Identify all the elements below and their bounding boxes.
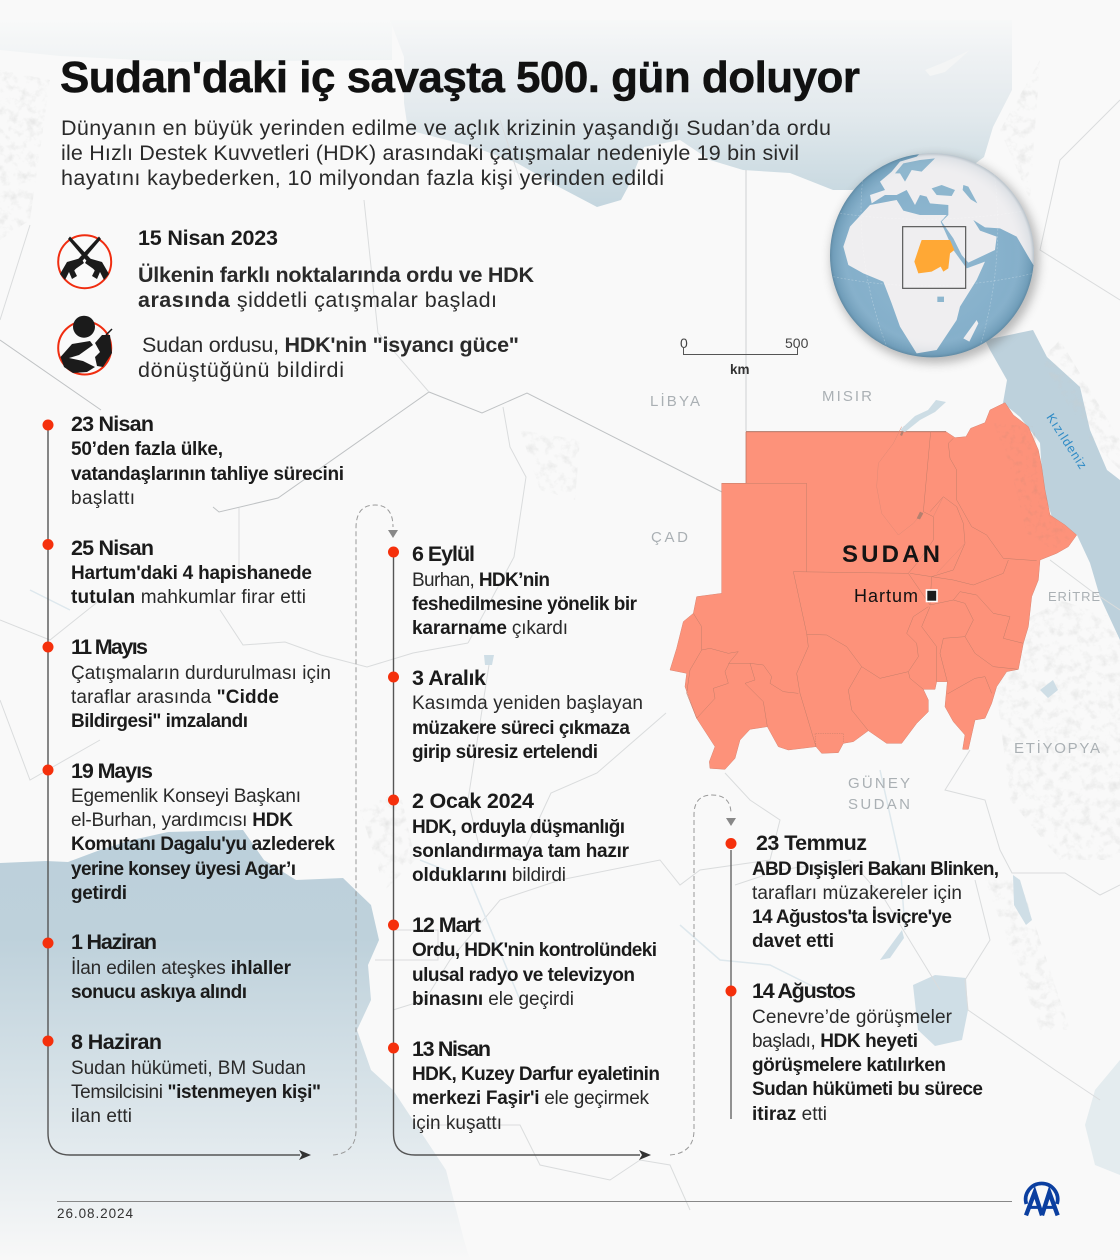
country labels: LİBYA: [650, 392, 700, 410]
entry: 23 Temmuz: davet etti: [752, 931, 834, 952]
entry: 6 Eylül: kararname çıkardı: [412, 618, 568, 639]
text: clashes started: arasında şiddetli çatışmalar başladı: [138, 288, 497, 312]
entry: 2 Ocak 2024: HDK, orduyla düşmanlığı: [412, 817, 625, 838]
entry: 11 Mayıs: [71, 635, 331, 732]
map: Sudan: [670, 403, 1077, 769]
entry: 1 Haziran: 1 Haziran: [71, 930, 157, 954]
entry: 19 Mayıs: yerine konsey üyesi Agar’ı: [71, 859, 296, 880]
timeline: first column: [42, 412, 398, 1160]
entry: 19 Mayıs: 19 Mayıs: [71, 759, 153, 783]
text: clashes started: [138, 262, 534, 312]
date: 26.08.2024: [57, 1206, 133, 1221]
entry: 13 Nisan: merkezi Faşir'i ele geçirmek: [412, 1088, 650, 1109]
entry: 14 Ağustos: itiraz etti: [752, 1104, 827, 1125]
icon: crossed rifles: [58, 235, 111, 288]
entry: 13 Nisan: HDK, Kuzey Darfur eyaletinin: [412, 1064, 660, 1085]
land: [843, 200, 985, 353]
entry: 13 Nisan: [412, 1037, 660, 1134]
scale bar: 500: [785, 335, 809, 351]
entry: 8 Haziran: Temsilcisini "istenmeyen kişi": [71, 1082, 321, 1103]
text: army statement: [138, 333, 519, 382]
entry: 14 Ağustos: görüşmelere katılırken: [752, 1055, 946, 1076]
entry: 13 Nisan: 13 Nisan: [412, 1037, 491, 1061]
entry: 3 Aralık: [412, 666, 643, 763]
entry: 12 Mart: binasını ele geçirdi: [412, 989, 574, 1010]
entry: 6 Eylül: [412, 542, 638, 639]
timeline: second column: [388, 542, 736, 1160]
Indian Ocean corner: [1085, 1060, 1120, 1175]
entry: 8 Haziran: ilan etti: [71, 1106, 132, 1127]
timeline: third column: [726, 831, 999, 1125]
country labels: ERİTRE: [1048, 589, 1100, 604]
entry: 1 Haziran: İlan edilen ateşkes ihlaller: [71, 958, 292, 979]
label: Red Sea: Kızıldeniz: [1043, 411, 1090, 471]
icon: rebel soldier: [58, 316, 112, 374]
entry: 23 Nisan: 50’den fazla ülke,: [71, 439, 223, 460]
entry: 25 Nisan: [71, 536, 312, 608]
entry: 23 Temmuz: tarafları müzakereler için: [752, 883, 962, 904]
entry: 25 Nisan: Hartum'daki 4 hapishanede: [71, 563, 312, 584]
lakes: [484, 655, 1058, 1046]
country labels: ETİYOPYA: [1014, 739, 1100, 757]
entry: 8 Haziran: Sudan hükümeti, BM Sudan: [71, 1058, 306, 1079]
Gulf of Guinea: [0, 830, 470, 1260]
islands: [925, 50, 970, 76]
locator box: [903, 227, 966, 288]
entry: 3 Aralık: girip süresiz ertelendi: [412, 742, 598, 763]
entry: 25 Nisan: tutulan mahkumlar firar etti: [71, 587, 306, 608]
entry: 23 Temmuz: 23 Temmuz: [756, 831, 867, 855]
country labels: MISIR: [822, 388, 872, 405]
entry: 2 Ocak 2024: olduklarını bildirdi: [412, 865, 566, 886]
entry: 3 Aralık: 3 Aralık: [412, 666, 486, 690]
text: army statement: Sudan ordusu, HDK'nin "isyancı güce": [142, 333, 519, 357]
entry: 14 Ağustos: [752, 979, 983, 1125]
entry: 14 Ağustos: Sudan hükümeti bu sürece: [752, 1079, 983, 1100]
entry: 23 Nisan: vatandaşlarının tahliye sürecini: [71, 464, 344, 485]
capital marker: Hartum: Hartum: [854, 586, 918, 606]
logo: AA: [1026, 1183, 1058, 1215]
entry: 6 Eylül: Burhan, HDK’nin: [412, 570, 550, 591]
entry: 14 Ağustos: 14 Ağustos: [752, 979, 856, 1003]
entry: 1 Haziran: sonucu askıya alındı: [71, 982, 247, 1003]
entry: 3 Aralık: müzakere süreci çıkmaza: [412, 718, 630, 739]
intro text block: Dünyanın en büyük yerinden edilme ve açlık krizinin yaşandığı Sudan’da ordu: [61, 116, 831, 140]
intro text block: ile Hızlı Destek Kuvvetleri (HDK) arasındaki çatışmalar nedeniyle 19 bin sivil: [61, 141, 799, 165]
intro text block: [61, 116, 831, 190]
title: Sudan'daki iç savaşta 500. gün doluyor: [60, 53, 860, 102]
text: clashes started: Ülkenin farklı noktalarında ordu ve HDK: [138, 262, 534, 287]
country labels: GÜNEY: [848, 774, 910, 792]
entry: 1 Haziran: [71, 930, 292, 1003]
Sudan label: SUDAN: [842, 541, 940, 568]
entry: 23 Nisan: [71, 412, 344, 509]
entry: 12 Mart: 12 Mart: [412, 913, 481, 937]
entry: 6 Eylül: feshedilmesine yönelik bir: [412, 594, 638, 615]
entry: 11 Mayıs: Çatışmaların durdurulması için: [71, 663, 331, 684]
scale bar: [680, 335, 809, 377]
entry: 14 Ağustos: Cenevre’de görüşmeler: [752, 1007, 953, 1028]
Sudan highlight: [914, 240, 954, 273]
terrain: [0, 60, 1120, 1030]
entry: 11 Mayıs: Bildirgesi" imzalandı: [71, 711, 248, 732]
country labels: SUDAN: [848, 796, 910, 813]
entry: 23 Temmuz: [752, 831, 999, 952]
entry: 23 Nisan: başlattı: [71, 488, 135, 509]
entry: 23 Temmuz: ABD Dışişleri Bakanı Blinken,: [752, 859, 999, 880]
entry: 12 Mart: Ordu, HDK'nin kontrolündeki: [412, 940, 657, 961]
text: army statement: dönüştüğünü bildirdi: [138, 358, 344, 382]
entry: 3 Aralık: Kasımda yeniden başlayan: [412, 693, 643, 714]
entry: 25 Nisan: 25 Nisan: [71, 536, 154, 560]
entry: 13 Nisan: için kuşattı: [412, 1113, 502, 1134]
heading: 15 Nisan 2023: 15 Nisan 2023: [138, 226, 278, 250]
entry: 2 Ocak 2024: 2 Ocak 2024: [412, 789, 534, 813]
entry: 23 Nisan: 23 Nisan: [71, 412, 154, 436]
entry: 23 Temmuz: 14 Ağustos'ta İsviçre'ye: [752, 907, 952, 928]
entry: 2 Ocak 2024: sonlandırmaya tam hazır: [412, 841, 630, 862]
country labels: ÇAD: [651, 529, 688, 546]
entry: 19 Mayıs: getirdi: [71, 883, 127, 904]
entry: 12 Mart: [412, 913, 657, 1010]
scale bar: km: [730, 362, 750, 377]
entry: 19 Mayıs: el-Burhan, yardımcısı HDK: [71, 810, 293, 831]
entry: 6 Eylül: 6 Eylül: [412, 542, 475, 566]
entry: 11 Mayıs: taraflar arasında "Cidde: [71, 687, 279, 708]
entry: 19 Mayıs: Komutanı Dagalu'yu azlederek: [71, 834, 335, 855]
entry: 19 Mayıs: [71, 759, 335, 904]
entry: 8 Haziran: 8 Haziran: [71, 1030, 162, 1054]
entry: 2 Ocak 2024: [412, 789, 630, 886]
entry: 8 Haziran: [71, 1030, 321, 1127]
intro text block: hayatını kaybederken, 10 milyondan fazla kişi yerinden edildi: [61, 166, 664, 190]
scale bar: 0: [680, 335, 688, 351]
Mediterranean Sea: [0, 20, 392, 62]
entry: 11 Mayıs: 11 Mayıs: [71, 635, 148, 659]
entry: 19 Mayıs: Egemenlik Konseyi Başkanı: [71, 786, 301, 807]
footer line: [57, 1200, 1012, 1202]
Lake Nasser: [900, 400, 946, 432]
country labels: [650, 388, 1100, 813]
entry: 12 Mart: ulusal radyo ve televizyon: [412, 965, 635, 986]
globe locator: [830, 140, 1053, 363]
entry: 14 Ağustos: başladı, HDK heyeti: [752, 1031, 918, 1052]
Red Sea: [985, 330, 1120, 640]
